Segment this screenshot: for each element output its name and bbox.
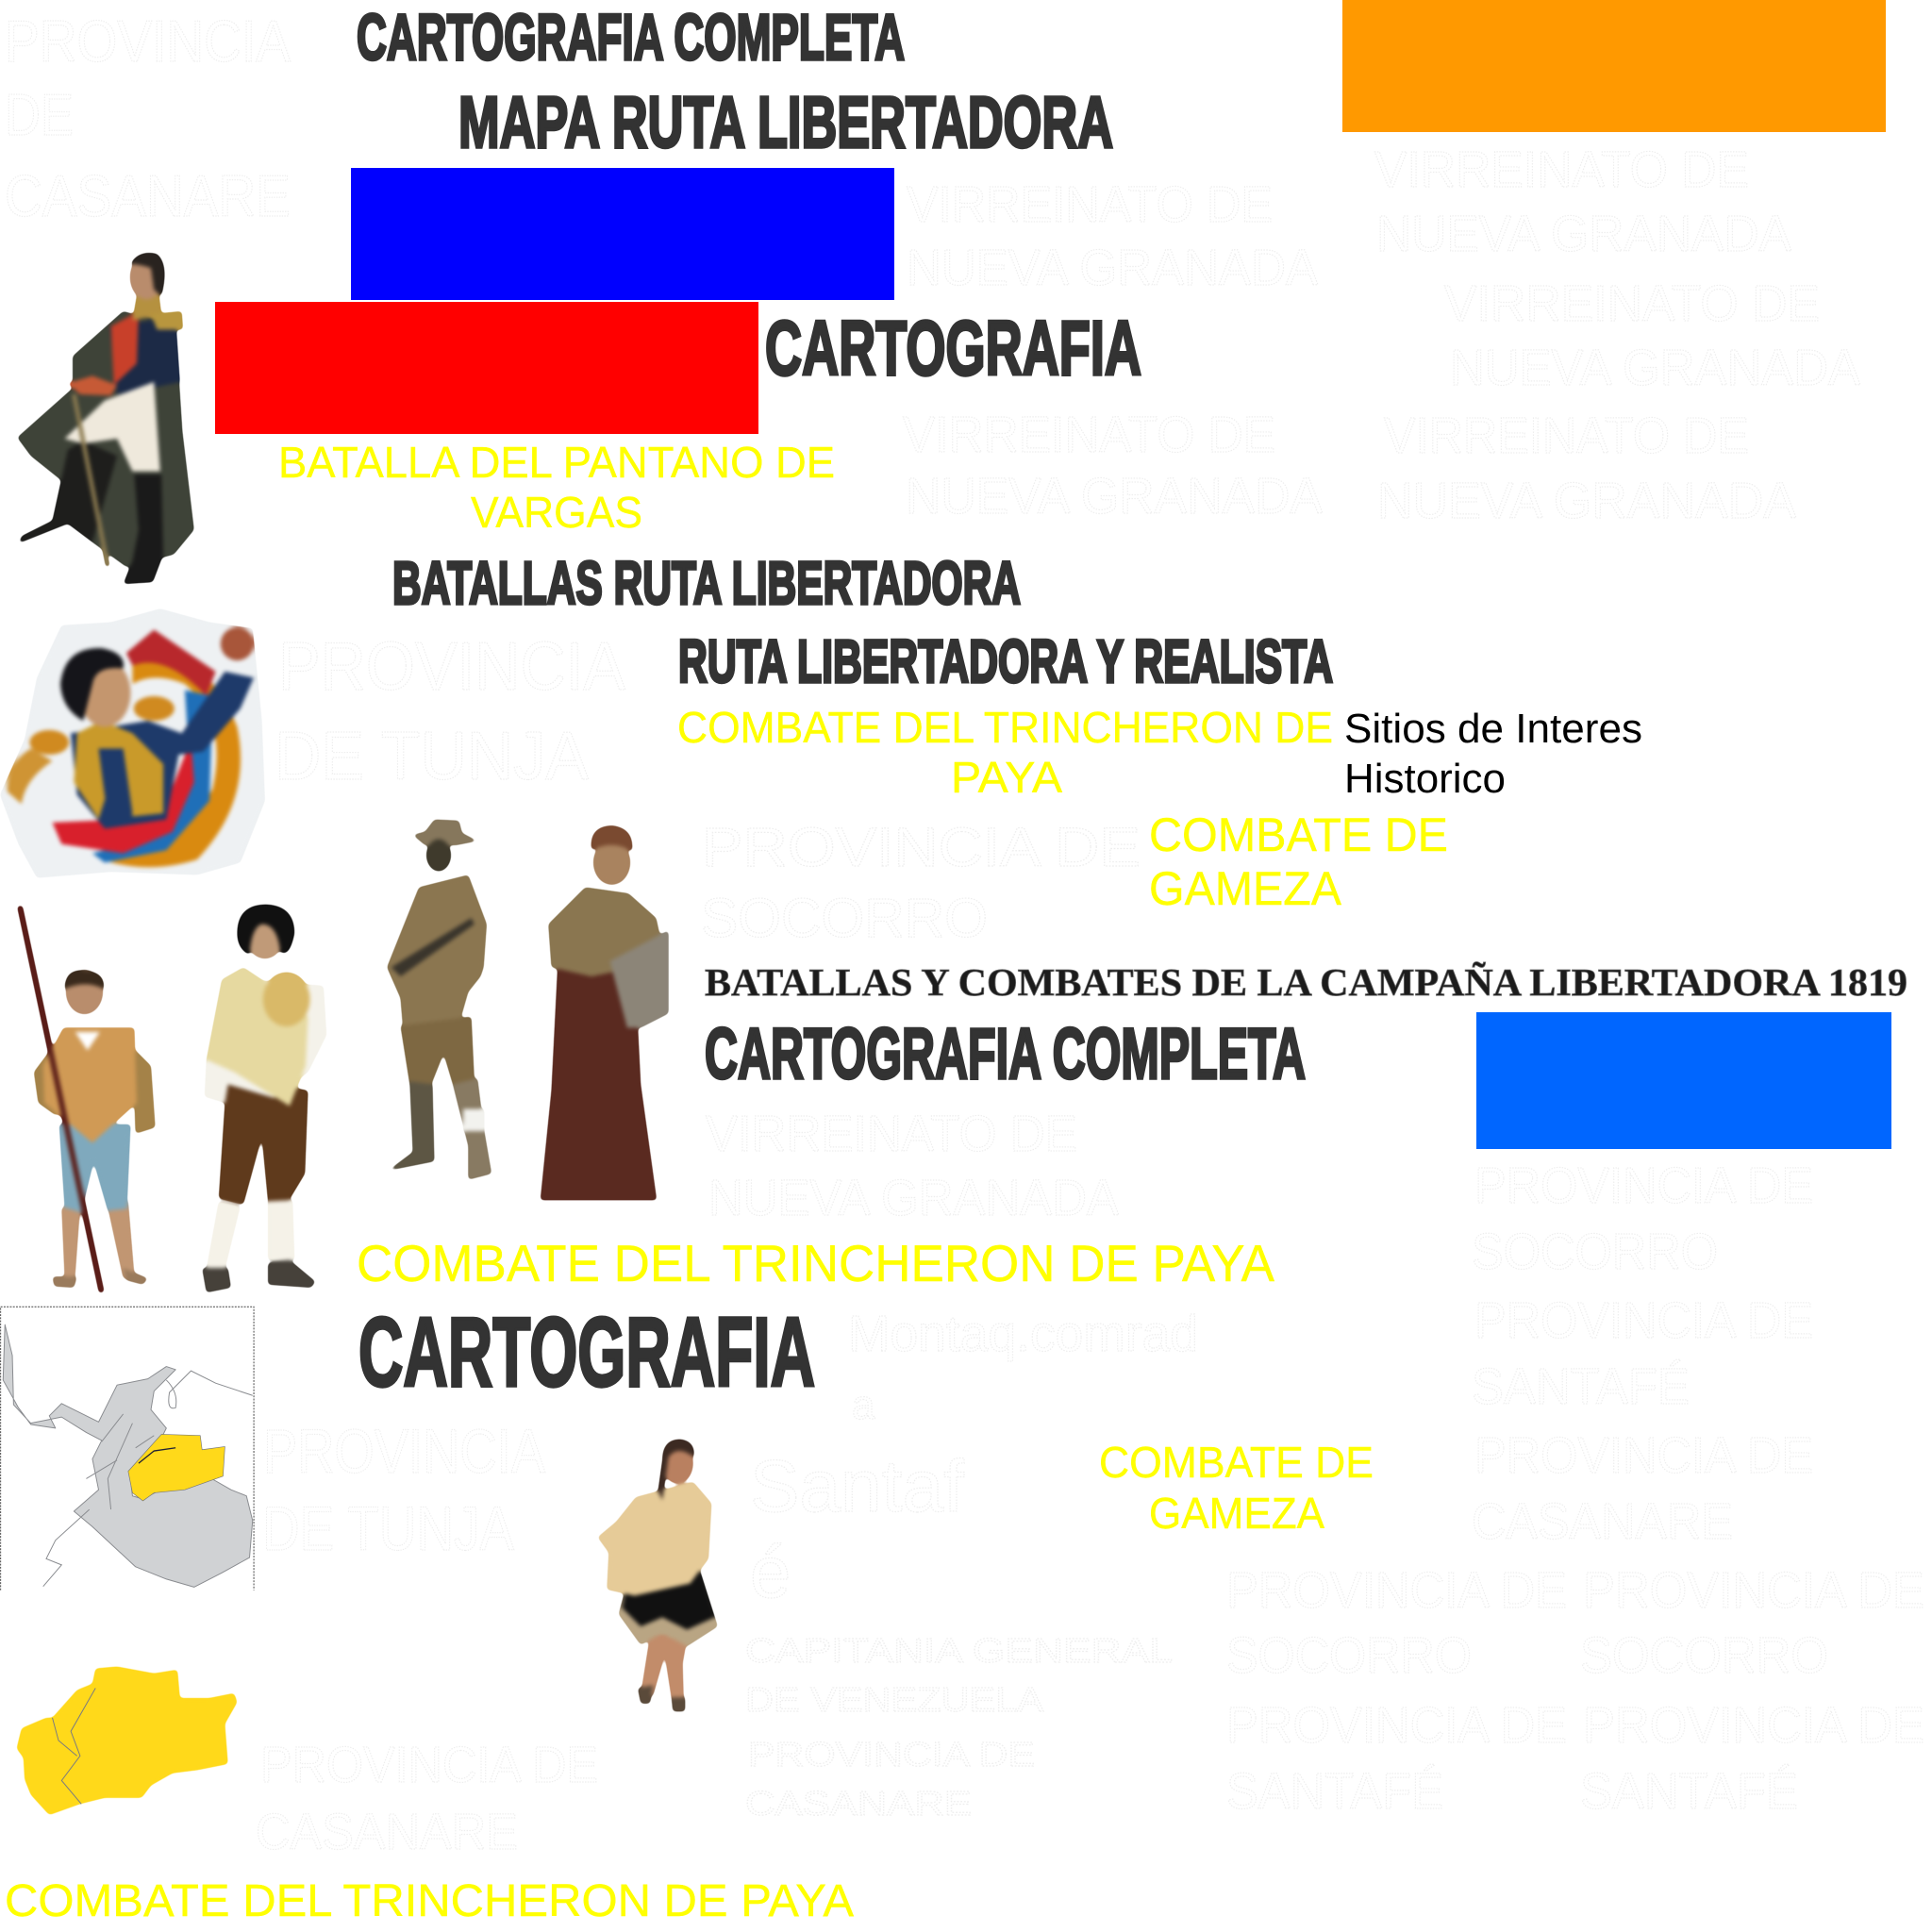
faint labels: capitania general: CAPITANIA GENERAL xyxy=(745,1631,1173,1670)
faint labels: provincia de casanare top left: DE xyxy=(5,83,74,148)
faint labels: provincia de casanare top left: CASANARE xyxy=(5,164,291,229)
illustrations xyxy=(0,253,718,1815)
faint labels: bottom right provinces: SANTAFÉ xyxy=(1580,1763,1798,1820)
faint labels: right column provinces xyxy=(1472,1158,1813,1550)
faint labels: bottom right provinces: PROVINCIA DE xyxy=(1226,1562,1567,1619)
label: sitios de interes historico xyxy=(1344,706,1642,802)
faint labels: provincia de socorro middle xyxy=(701,817,1141,949)
orange rectangle xyxy=(1342,0,1886,132)
illustration: boy with spear xyxy=(20,906,156,1292)
faint labels: virreinato de nueva granada group: VIRREINATO DE xyxy=(1374,142,1749,198)
label: combate del trincheron de paya centered xyxy=(677,703,1333,802)
heading: cartografia completa top: CARTOGRAFIA COMPLETA xyxy=(357,1,905,74)
faint labels: virreinato de nueva granada group: NUEVA GRANADA xyxy=(1450,340,1860,396)
faint labels: provincia de casanare top left: PROVINCIA xyxy=(5,9,291,75)
faint labels: virreinato de nueva granada group: VIRREINATO DE xyxy=(907,176,1273,233)
illustration: man with wide hat and rifle xyxy=(387,820,491,1180)
faint labels: virreinato de nueva granada group: VIRREINATO DE xyxy=(1444,275,1820,332)
faint labels: capitania general: CASANARE xyxy=(745,1784,972,1823)
faint labels: virreinato de nueva granada group: VIRREINATO DE xyxy=(706,1106,1077,1162)
faint labels: provincia de casanare bottom left: CASANARE xyxy=(256,1804,518,1860)
red rectangle xyxy=(215,302,758,434)
faint labels: provincia de tunja upper: DE TUNJA xyxy=(275,719,589,794)
illustration: woman running xyxy=(598,1440,718,1711)
illustration: woman with brown dress xyxy=(541,825,669,1200)
faint labels: provincia de casanare bottom left xyxy=(256,1737,598,1860)
label: batalla del pantano de vargas xyxy=(278,438,835,537)
label: combate de gameza upper: GAMEZA xyxy=(1149,862,1342,915)
faint labels: right column provinces: CASANARE xyxy=(1472,1493,1733,1550)
label: combate del trincheron de paya large: COMBATE DEL TRINCHERON DE PAYA xyxy=(357,1234,1274,1292)
faint labels: virreinato de nueva granada group: NUEVA GRANADA xyxy=(906,468,1323,525)
heading: cartografia large: CARTOGRAFIA xyxy=(358,1298,815,1407)
faint labels: capitania general xyxy=(745,1631,1173,1823)
faint labels: capitania general: PROVINCIA DE xyxy=(748,1735,1035,1774)
faint labels: provincia de tunja lower: PROVINCIA xyxy=(263,1416,545,1486)
faint labels: provincia de socorro middle: SOCORRO xyxy=(701,888,988,949)
faint labels: montaq comrad santafe xyxy=(750,1306,1198,1613)
faint labels: virreinato de nueva granada group: VIRREINATO DE xyxy=(1384,408,1749,464)
heading: cartografia completa middle: CARTOGRAFIA COMPLETA xyxy=(705,1014,1306,1094)
label: combate de gameza lower: GAMEZA xyxy=(1149,1489,1324,1538)
faint labels: right column provinces: PROVINCIA DE xyxy=(1474,1427,1813,1484)
faint labels: montaq comrad santafe: Santaf xyxy=(750,1444,964,1527)
faint labels: provincia de tunja upper: PROVINCIA xyxy=(278,629,625,705)
label: combate del trincheron de paya centered: COMBATE DEL TRINCHERON DE xyxy=(677,703,1333,752)
illustration: Bolivar standing portrait xyxy=(17,253,194,584)
illustration: man with poncho and hat xyxy=(202,905,326,1292)
blue rectangle xyxy=(351,168,894,300)
label: combate del trincheron de paya centered: PAYA xyxy=(951,753,1062,802)
faint labels: montaq comrad santafe: Montaq.comrad xyxy=(848,1306,1198,1362)
label: batalla del pantano de vargas: BATALLA DEL PANTANO DE xyxy=(278,438,835,487)
faint labels: virreinato de nueva granada group: NUEVA GRANADA xyxy=(1377,473,1796,529)
faint labels: virreinato de nueva granada group: NUEVA GRANADA xyxy=(1376,206,1791,262)
faint labels: bottom right provinces: SOCORRO xyxy=(1226,1627,1472,1684)
faint labels: right column provinces: PROVINCIA DE xyxy=(1474,1292,1813,1349)
faint labels: provincia de tunja lower xyxy=(262,1416,545,1563)
illustration: Bolivar with flag cartoon xyxy=(0,608,265,878)
faint labels: virreinato de nueva granada group: VIRREINATO DE xyxy=(903,407,1275,463)
heading: batallas y combates gothic title: BATALLAS Y COMBATES DE LA CAMPAÑA LIBERTADORA 1819 xyxy=(705,960,1907,1004)
heading: batallas ruta libertadora: BATALLAS RUTA LIBERTADORA xyxy=(392,549,1021,617)
faint labels: bottom right provinces: SOCORRO xyxy=(1580,1627,1828,1684)
illustration: map of Nueva Granada xyxy=(1,1307,254,1591)
heading: mapa ruta libertadora: MAPA RUTA LIBERTADORA xyxy=(458,82,1113,163)
faint labels: montaq comrad santafe: é xyxy=(750,1530,791,1613)
label: combate del trincheron de paya bottom: COMBATE DEL TRINCHERON DE PAYA xyxy=(5,1876,854,1926)
label: sitios de interes historico: Historico xyxy=(1344,756,1506,802)
faint labels: bottom right provinces xyxy=(1226,1562,1924,1820)
faint labels: provincia de socorro middle: PROVINCIA DE xyxy=(702,817,1141,878)
faint labels: bottom right provinces: PROVINCIA DE xyxy=(1226,1697,1567,1754)
label: combate de gameza lower xyxy=(1099,1438,1374,1538)
label: combate de gameza upper: COMBATE DE xyxy=(1149,808,1448,861)
heading: ruta libertadora y realista: RUTA LIBERTADORA Y REALISTA xyxy=(678,627,1333,695)
faint labels: virreinato de nueva granada group: NUEVA GRANADA xyxy=(907,240,1318,296)
faint labels: capitania general: DE VENEZUELA xyxy=(745,1680,1043,1719)
faint labels: provincia de casanare top left xyxy=(5,9,291,229)
faint labels: virreinato de nueva granada group: NUEVA GRANADA xyxy=(708,1170,1119,1226)
label: sitios de interes historico: Sitios de Interes xyxy=(1344,706,1642,752)
faint labels: right column provinces: SANTAFÉ xyxy=(1472,1358,1690,1415)
label: combate de gameza upper xyxy=(1149,808,1448,915)
label: batalla del pantano de vargas: VARGAS xyxy=(471,488,642,537)
faint labels: montaq comrad santafe: a xyxy=(852,1382,875,1428)
faint labels: provincia de tunja upper xyxy=(275,629,625,794)
light blue rectangle xyxy=(1476,1012,1891,1149)
illustration: yellow Casanare map xyxy=(17,1667,237,1815)
faint labels: bottom right provinces: SANTAFÉ xyxy=(1226,1763,1443,1820)
heading: cartografia: CARTOGRAFIA xyxy=(765,306,1141,391)
faint labels: provincia de tunja lower: DE TUNJA xyxy=(262,1493,514,1563)
faint labels: virreinato de nueva granada group xyxy=(706,142,1860,1226)
faint labels: provincia de casanare bottom left: PROVINCIA DE xyxy=(260,1737,598,1793)
faint labels: right column provinces: PROVINCIA DE xyxy=(1474,1158,1813,1214)
label: combate de gameza lower: COMBATE DE xyxy=(1099,1438,1374,1487)
faint labels: right column provinces: SOCORRO xyxy=(1472,1224,1718,1280)
